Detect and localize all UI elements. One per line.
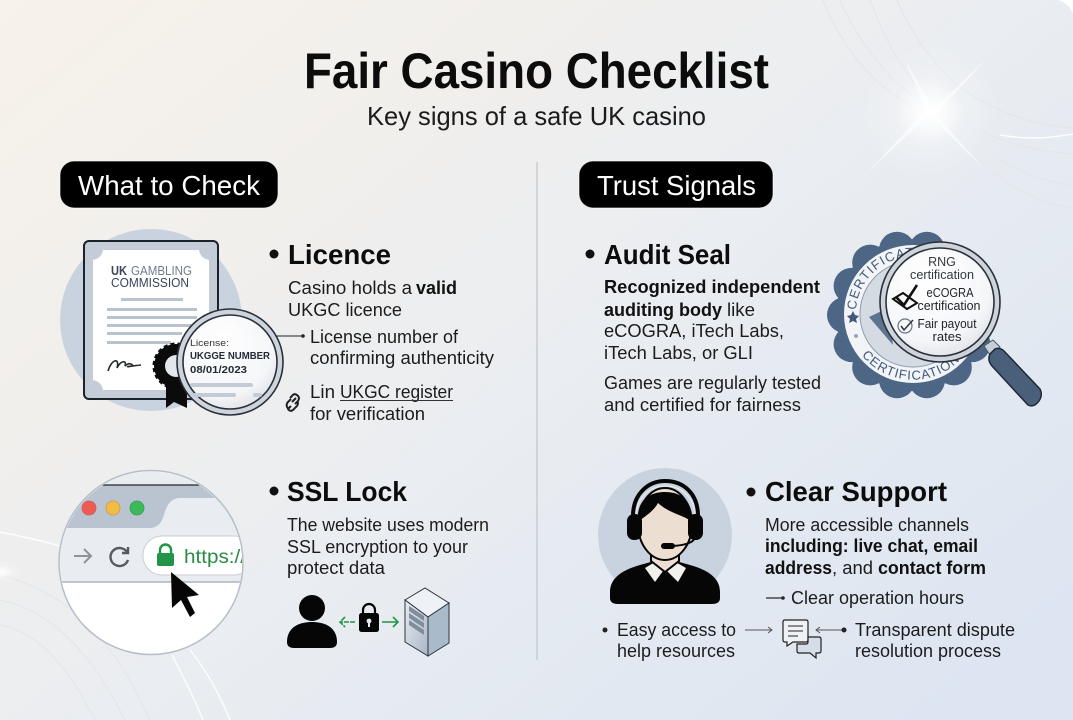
audit seal note: Games are regularly tested (604, 373, 821, 393)
callout: UKGC register link: UKGC register (340, 382, 453, 402)
subtitle: Key signs of a safe UK casino (367, 101, 706, 131)
audit seal note: and certified for fairness (604, 395, 801, 415)
callout: clear operation hours: Clear operation hours (791, 588, 964, 608)
callout: transparent dispute resolution (816, 620, 1015, 661)
clear support heading: Clear Support (765, 476, 947, 507)
icon: certification seal with magnifier: rates (932, 330, 962, 344)
icon: licence certificate with magnifier: UK (111, 263, 128, 278)
ssl heading: SSL Lock (287, 476, 407, 507)
icon: licence certificate with magnifier: License: (190, 338, 229, 349)
audit seal description: Recognized independent (604, 277, 820, 297)
audit seal description (604, 277, 820, 363)
callout: transparent dispute resolution: resolution process (855, 641, 1001, 661)
icon: support agent with headset (598, 468, 732, 604)
icon: certification seal with magnifier: CERTIFICATION (864, 351, 959, 380)
ssl description: The website uses modern (287, 515, 489, 535)
center divider (536, 162, 538, 660)
ssl description: SSL encryption to your (287, 537, 468, 557)
callout: UKGC register link: for verification (310, 404, 425, 424)
icon: certification seal with magnifier: certification (918, 299, 981, 313)
icon: certification seal with magnifier: eCOGRA (926, 286, 974, 300)
heading pill: Trust Signals: Trust Signals (597, 170, 756, 201)
icon: certification seal with magnifier (827, 232, 1042, 407)
icon: licence certificate with magnifier (60, 229, 283, 415)
title: Fair Casino Checklist (304, 43, 769, 99)
icon: licence certificate with magnifier: UKGGE NUMBER (190, 350, 270, 362)
licence heading: Licence (288, 239, 391, 270)
ssl description: protect data (287, 558, 386, 578)
callout: transparent dispute resolution: Transparent dispute (855, 620, 1015, 640)
callout: UKGC register link: Lin (310, 382, 335, 402)
licence description: UKGC licence (288, 300, 402, 320)
audit seal description: like (727, 300, 755, 320)
icon: browser address bar in circle (59, 470, 253, 654)
callout: license number (277, 327, 494, 368)
audit seal note (604, 373, 821, 415)
icon: browser address bar in circle: https:// (184, 547, 247, 568)
audit seal description: auditing body (604, 300, 722, 320)
clear support description: contact form (878, 558, 986, 578)
icon: licence certificate with magnifier: GAMBLING (131, 263, 192, 278)
callout: easy access to help resources: Easy access to (617, 620, 736, 640)
callout: easy access to help resources: help resources (617, 641, 735, 661)
panel: licence (60, 229, 494, 424)
audit seal description: eCOGRA, iTech Labs, (604, 321, 784, 341)
clear support description (765, 515, 986, 578)
panel: clear support (598, 468, 1015, 661)
clear support description: More accessible channels (765, 515, 969, 535)
licence description (288, 278, 457, 320)
heading pill: What to Check: What to Check (78, 170, 261, 201)
panel: ssl lock (59, 470, 489, 656)
panel: audit seal (586, 232, 1042, 415)
icon: chat bubbles (783, 620, 821, 658)
icon: user, padlock and server connection (287, 588, 449, 656)
clear support description: address (765, 558, 832, 578)
icon: certification seal with magnifier: Fair payout (918, 317, 977, 331)
icon: certification seal with magnifier: certification (910, 268, 974, 282)
heading pill: Trust Signals (579, 161, 773, 208)
audit seal description: iTech Labs, or GLI (604, 343, 753, 363)
icon: certification seal with magnifier: RNG (928, 255, 956, 269)
clear support description: , and (832, 558, 873, 578)
callout: easy access to help resources (602, 620, 772, 661)
callout: license number: License number of (310, 327, 459, 347)
clear support description: including: live chat, email (765, 536, 978, 556)
licence description: valid (416, 278, 457, 298)
licence description: Casino holds a (288, 278, 413, 298)
icon: licence certificate with magnifier: COMMISSION (111, 275, 189, 290)
ssl description (287, 515, 489, 578)
callout: license number: confirming authenticity (310, 348, 494, 368)
audit seal heading: Audit Seal (604, 239, 731, 270)
heading pill: What to Check (60, 161, 278, 208)
icon: licence certificate with magnifier: 08/01/2023 (190, 364, 247, 376)
callout: UKGC register link (287, 382, 453, 424)
